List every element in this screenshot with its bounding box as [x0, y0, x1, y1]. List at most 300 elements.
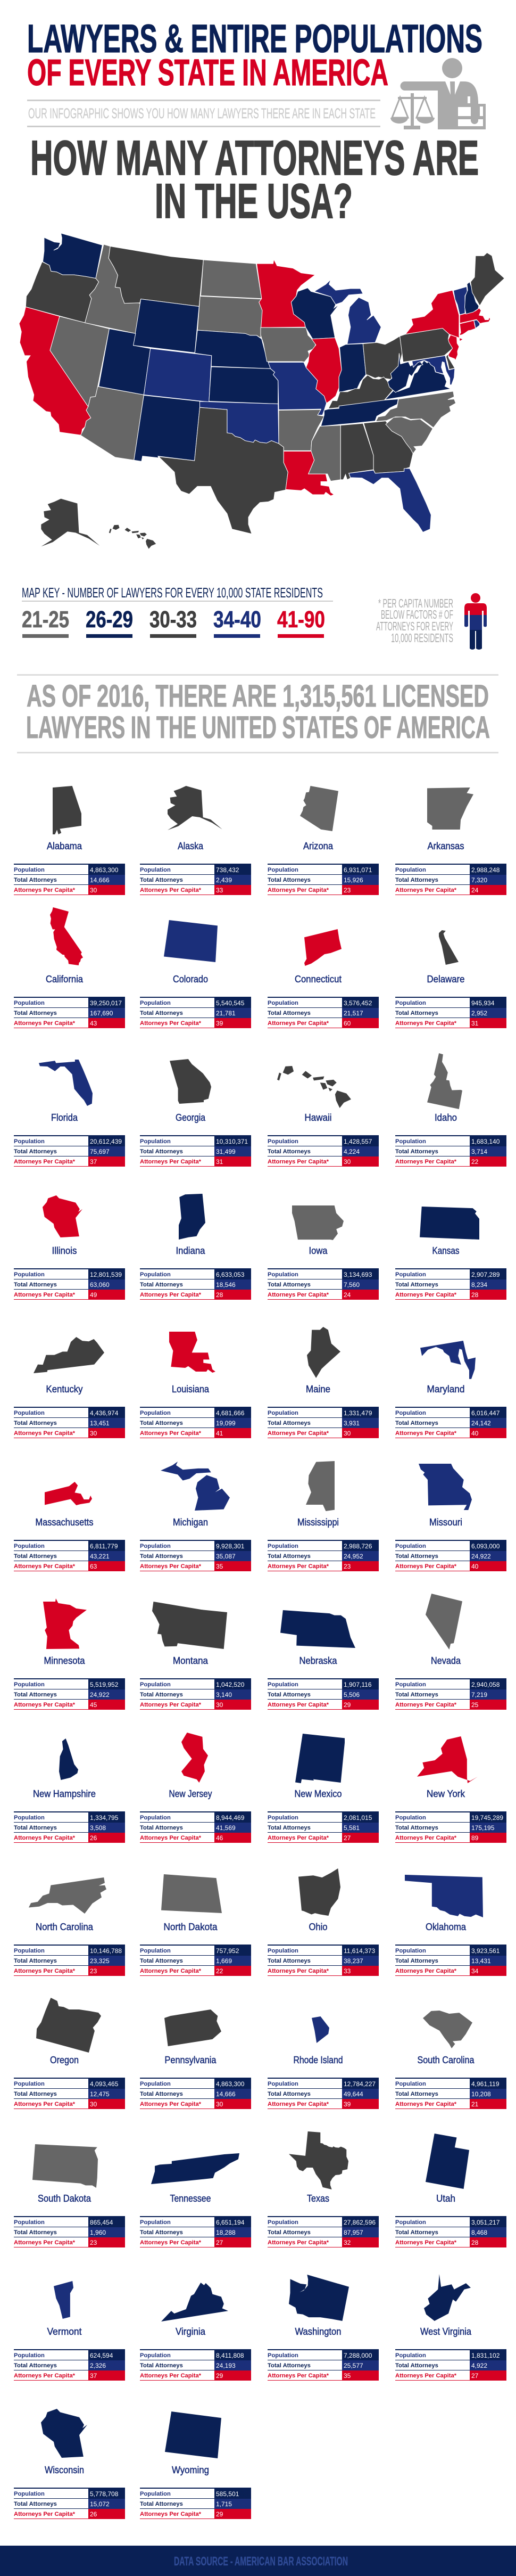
stats: Maine: Attorneys Per Capita*: [268, 1430, 329, 1437]
card: Rhode Island: [268, 2016, 379, 2109]
stats: Colorado: Attorneys Per Capita*: [140, 1020, 202, 1027]
stats: Texas: Population: [268, 2219, 298, 2226]
stats: North Carolina: 10,146,788: [90, 1947, 122, 1955]
stats: West Virginia: Total Attorneys: [395, 2362, 438, 2369]
stats: Connecticut: [268, 997, 379, 1028]
name: Alaska: Alaska: [178, 841, 204, 851]
stats: Wisconsin: Attorneys Per Capita*: [14, 2511, 76, 2517]
subtitle strip: [27, 100, 380, 127]
stats: North Dakota: 757,952: [216, 1947, 239, 1955]
stats: New Mexico: Attorneys Per Capita*: [268, 1835, 329, 1841]
stats: Maryland: [395, 1407, 506, 1438]
icon: Colorado: [164, 920, 218, 962]
stats: South Dakota: Total Attorneys: [14, 2229, 57, 2236]
key range: 30-33: [149, 606, 197, 638]
stats: Indiana: 18,546: [216, 1281, 236, 1289]
stats: North Dakota: 1,669: [216, 1957, 232, 1965]
stats: Massachusetts: Attorneys Per Capita*: [14, 1563, 76, 1570]
stats: Alabama: [14, 864, 125, 895]
card: Colorado: [140, 920, 251, 1028]
stats: Maryland: Total Attorneys: [395, 1420, 438, 1426]
card: Florida: [14, 1060, 125, 1167]
stats: Ohio: 38,237: [344, 1957, 363, 1965]
name: Nebraska: Nebraska: [299, 1655, 337, 1666]
icon: Louisiana: [169, 1332, 215, 1373]
stats: Arizona: 23: [344, 887, 351, 894]
stats: Virginia: 29: [216, 2372, 223, 2380]
stats: Kansas: [395, 1268, 506, 1300]
stats: Utah: 8,468: [471, 2229, 487, 2236]
stats: Pennsylvania: Attorneys Per Capita*: [140, 2101, 202, 2107]
stats: New Hampshire: [14, 1811, 125, 1843]
card: Washington: [268, 2275, 379, 2381]
stats: Oregon: Total Attorneys: [14, 2091, 57, 2097]
stats: Massachusetts: 43,221: [90, 1553, 110, 1560]
stats: Kansas: Population: [395, 1271, 426, 1278]
stats: Florida: Population: [14, 1138, 45, 1145]
stats: Massachusetts: Total Attorneys: [14, 1553, 57, 1560]
stats: Maryland: 24,142: [471, 1420, 491, 1427]
name: West Virginia: West Virginia: [420, 2326, 472, 2337]
card: Nevada: [395, 1594, 506, 1710]
stats: New Mexico: 5,581: [344, 1824, 360, 1832]
icon: California: [50, 907, 83, 965]
stats: California: Population: [14, 1000, 45, 1006]
stats: Nevada: Attorneys Per Capita*: [395, 1702, 457, 1708]
icon: North Carolina: [29, 1877, 106, 1914]
name: South Carolina: South Carolina: [417, 2055, 475, 2065]
stats: Alabama: Population: [14, 867, 45, 873]
card: Alabama: [14, 786, 125, 895]
card: New Hampshire: [14, 1738, 125, 1843]
stats: North Carolina: 23,325: [90, 1957, 110, 1965]
card: Tennessee: [140, 2153, 251, 2247]
name: Indiana: Indiana: [176, 1245, 205, 1256]
name: New York: New York: [427, 1789, 465, 1799]
stats: Utah: Attorneys Per Capita*: [395, 2239, 457, 2246]
stats: West Virginia: 1,831,102: [471, 2352, 500, 2359]
stats: South Carolina: Population: [395, 2081, 426, 2087]
key range: 34-40: 34-40: [213, 606, 261, 633]
footer: data source: DATA SOURCE - AMERICAN BAR ASSOCIATION: [174, 2554, 348, 2568]
icon: Minnesota: [43, 1598, 87, 1649]
card: Montana: [140, 1602, 251, 1710]
stats: Alabama: 30: [90, 887, 97, 894]
stats: Washington: [268, 2349, 379, 2381]
card: Ohio: [268, 1868, 379, 1976]
icon: Delaware: [439, 930, 459, 965]
stats: New Jersey: 46: [216, 1834, 223, 1842]
stats: Connecticut: Attorneys Per Capita*: [268, 1020, 329, 1027]
stats: Iowa: 7,560: [344, 1281, 360, 1289]
stats: Arizona: 15,926: [344, 876, 363, 884]
stats: Vermont: Attorneys Per Capita*: [14, 2373, 76, 2379]
card: Maryland: [395, 1341, 506, 1438]
card: Utah: [395, 2134, 506, 2247]
card: Arkansas: [395, 787, 506, 895]
stats: South Carolina: Total Attorneys: [395, 2091, 438, 2097]
stats: West Virginia: Attorneys Per Capita*: [395, 2373, 457, 2379]
stats: Delaware: Population: [395, 1000, 426, 1006]
name: Arizona: Arizona: [303, 841, 334, 851]
key range: 41-90: [277, 606, 325, 638]
stats: Nevada: 25: [471, 1701, 479, 1709]
stats: Ohio: 11,614,373: [344, 1947, 375, 1955]
name: Minnesota: Minnesota: [44, 1655, 85, 1666]
stats: Missouri: 24,922: [471, 1553, 491, 1560]
stats: Missouri: Attorneys Per Capita*: [395, 1563, 457, 1570]
stats: Arizona: 6,931,071: [344, 866, 372, 874]
icon: Montana: [152, 1602, 227, 1649]
icon: Oklahoma: [405, 1875, 483, 1917]
icon: Georgia: [170, 1059, 211, 1104]
stats: New Hampshire: Total Attorneys: [14, 1825, 57, 1831]
stats: Delaware: 31: [471, 1020, 479, 1027]
stats: North Carolina: Population: [14, 1948, 45, 1954]
name: Idaho: Idaho: [435, 1112, 457, 1123]
stats: New York: 175,195: [471, 1824, 495, 1832]
stats: Texas: Total Attorneys: [268, 2229, 311, 2236]
stats: Michigan: Attorneys Per Capita*: [140, 1563, 202, 1570]
stats: Louisiana: 19,099: [216, 1420, 236, 1427]
icon: Virginia: [161, 2283, 228, 2321]
name: Alabama: Alabama: [47, 841, 82, 851]
stats: Louisiana: 41: [216, 1430, 223, 1437]
name: Mississippi: Mississippi: [297, 1517, 339, 1528]
name: Missouri: Missouri: [429, 1517, 462, 1528]
stats: Maryland: Attorneys Per Capita*: [395, 1430, 457, 1437]
stats: Hawaii: Attorneys Per Capita*: [268, 1159, 329, 1165]
stats: Alaska: 2,439: [216, 876, 232, 884]
stats: New Jersey: Population: [140, 1815, 171, 1821]
stats: Oklahoma: [395, 1945, 506, 1976]
stats: Arkansas: 7,320: [471, 876, 487, 884]
stats: Vermont: Total Attorneys: [14, 2362, 57, 2369]
stats: Kentucky: 30: [90, 1430, 97, 1437]
stats: Oklahoma: Attorneys Per Capita*: [395, 1968, 457, 1974]
stats: Colorado: Total Attorneys: [140, 1010, 183, 1016]
icon: West Virginia: [424, 2274, 471, 2321]
stats: South Dakota: 865,454: [90, 2219, 113, 2226]
stats: Iowa: Attorneys Per Capita*: [268, 1292, 329, 1298]
stats: Pennsylvania: Total Attorneys: [140, 2091, 183, 2097]
key range: 30-33: 30-33: [149, 606, 197, 633]
stats: Florida: [14, 1135, 125, 1167]
stats: Utah: 3,051,217: [471, 2219, 500, 2226]
key range: 34-40: [213, 606, 261, 638]
icon: North Dakota: [161, 1874, 222, 1913]
stats: Maine: 30: [344, 1430, 351, 1437]
card: Delaware: [395, 930, 506, 1028]
icon: Massachusetts: [45, 1482, 92, 1505]
stats: Rhode Island: Population: [268, 2081, 298, 2087]
icon: Connecticut: [304, 929, 342, 966]
icon: New Jersey: [181, 1733, 208, 1783]
card: New Jersey: [140, 1733, 251, 1843]
card: Vermont: [14, 2281, 125, 2381]
stats: Wisconsin: Population: [14, 2491, 45, 2497]
stats: Alabama: 14,666: [90, 876, 110, 884]
stats: Utah: [395, 2216, 506, 2247]
key range: 26-29: 26-29: [86, 606, 133, 633]
card: Oregon: [14, 1998, 125, 2109]
stats: Maryland: 6,016,447: [471, 1409, 500, 1417]
stats: Florida: Attorneys Per Capita*: [14, 1159, 76, 1165]
stats: Idaho: Attorneys Per Capita*: [395, 1159, 457, 1165]
stats: Hawaii: 30: [344, 1158, 351, 1166]
stats: Oklahoma: 34: [471, 1967, 479, 1975]
stats: South Dakota: Attorneys Per Capita*: [14, 2239, 76, 2246]
heading: how many attorneys are in the USA: IN THE USA?: [155, 174, 353, 228]
heading: how many attorneys are in the USA: [30, 131, 479, 228]
stats: New York: Total Attorneys: [395, 1825, 438, 1831]
card: West Virginia: [395, 2274, 506, 2381]
stats: Colorado: 39: [216, 1020, 223, 1027]
key range: 21-25: 21-25: [22, 606, 69, 633]
stats: Oklahoma: Total Attorneys: [395, 1958, 438, 1964]
stats: Vermont: [14, 2349, 125, 2381]
stats: Hawaii: Total Attorneys: [268, 1148, 311, 1155]
stats: Arizona: [268, 864, 379, 895]
stats: Alabama: 4,863,300: [90, 866, 119, 874]
stats: Minnesota: Attorneys Per Capita*: [14, 1702, 76, 1708]
footer: data source: [0, 2546, 516, 2576]
stats: Kentucky: Population: [14, 1410, 45, 1416]
name: Georgia: Georgia: [176, 1112, 206, 1123]
stats: Nevada: Population: [395, 1681, 426, 1688]
name: Hawaii: Hawaii: [304, 1112, 332, 1123]
stats: Georgia: 31,499: [216, 1148, 236, 1155]
stats: Pennsylvania: [140, 2078, 251, 2109]
stats: Indiana: 28: [216, 1291, 223, 1299]
name: Connecticut: Connecticut: [295, 974, 342, 985]
stats: Delaware: [395, 997, 506, 1028]
stats: Pennsylvania: Population: [140, 2081, 171, 2087]
stats: Tennessee: Total Attorneys: [140, 2229, 183, 2236]
stats: Louisiana: [140, 1407, 251, 1438]
name: Virginia: Virginia: [176, 2326, 206, 2337]
stats: Ohio: [268, 1945, 379, 1976]
stats: Idaho: [395, 1135, 506, 1167]
stats: New York: 19,745,289: [471, 1814, 503, 1822]
stats: Illinois: [14, 1268, 125, 1300]
stats: Alaska: Population: [140, 867, 171, 873]
stats: Arizona: Attorneys Per Capita*: [268, 887, 329, 893]
stats: Colorado: Population: [140, 1000, 171, 1006]
map key: [22, 585, 333, 638]
stats: Iowa: Population: [268, 1271, 298, 1278]
icon: Rhode Island: [312, 2016, 329, 2043]
stats: Nebraska: 5,506: [344, 1691, 360, 1699]
name: Arkansas: Arkansas: [428, 841, 464, 851]
card: Texas: [268, 2131, 379, 2247]
stats: Indiana: Total Attorneys: [140, 1282, 183, 1288]
name: California: California: [46, 974, 84, 985]
stats: Kansas: 8,234: [471, 1281, 487, 1289]
stats: California: [14, 997, 125, 1028]
stats: Wyoming: 29: [216, 2511, 223, 2518]
stats: Kansas: Total Attorneys: [395, 1282, 438, 1288]
card: Indiana: [140, 1194, 251, 1300]
card: Maine: [268, 1327, 379, 1438]
icon: Washington: [289, 2275, 349, 2321]
stats: Wyoming: Attorneys Per Capita*: [140, 2511, 202, 2517]
icon: Arizona: [300, 786, 338, 831]
icon: Indiana: [179, 1194, 205, 1240]
stats: California: 43: [90, 1020, 97, 1027]
total licensed lawyers banner: [17, 674, 498, 753]
stats: Wyoming: 1,715: [216, 2500, 232, 2508]
stats: Idaho: Population: [395, 1138, 426, 1145]
stats: Connecticut: Total Attorneys: [268, 1010, 311, 1016]
stats: Wisconsin: 15,072: [90, 2500, 110, 2508]
stats: Tennessee: 27: [216, 2239, 223, 2246]
card: South Carolina: [395, 2011, 506, 2109]
stats: Mississippi: [268, 1540, 379, 1571]
stats: Virginia: Total Attorneys: [140, 2362, 183, 2369]
name: Pennsylvania: Pennsylvania: [165, 2055, 217, 2065]
stats: Vermont: 624,594: [90, 2352, 113, 2359]
card: Alaska: [140, 786, 251, 895]
stats: Nevada: 2,940,058: [471, 1681, 500, 1688]
stats: New York: Population: [395, 1815, 426, 1821]
icon: Illinois: [43, 1195, 82, 1237]
icon: Vermont: [54, 2281, 73, 2319]
stats: Wyoming: 585,501: [216, 2490, 239, 2498]
stats: New Mexico: [268, 1811, 379, 1843]
stats: North Dakota: Attorneys Per Capita*: [140, 1968, 202, 1974]
icon: Nebraska: [280, 1610, 355, 1648]
icon: South Carolina: [423, 2011, 472, 2048]
stats: Arizona: Population: [268, 867, 298, 873]
stats: Texas: 32: [344, 2239, 351, 2246]
stats: Florida: 37: [90, 1158, 97, 1166]
stats: Vermont: 2,326: [90, 2362, 106, 2369]
stats: North Dakota: [140, 1945, 251, 1976]
stats: New Hampshire: 3,508: [90, 1824, 106, 1832]
stats: Virginia: 24,193: [216, 2362, 236, 2369]
stats: Nevada: 7,219: [471, 1691, 487, 1699]
stats: Montana: Total Attorneys: [140, 1692, 183, 1698]
name: Wisconsin: Wisconsin: [45, 2465, 84, 2475]
stats: Maryland: 40: [471, 1430, 479, 1437]
card: California: [14, 907, 125, 1028]
stats: New Jersey: 41,569: [216, 1824, 236, 1832]
stats: Illinois: Total Attorneys: [14, 1282, 57, 1288]
name: Tennessee: Tennessee: [170, 2193, 211, 2204]
stats: Georgia: [140, 1135, 251, 1167]
stats: Minnesota: 5,519,952: [90, 1681, 119, 1688]
stats: Hawaii: [268, 1135, 379, 1167]
stats: New Jersey: Attorneys Per Capita*: [140, 1835, 202, 1841]
card: New York: [395, 1736, 506, 1843]
stats: Pennsylvania: 30: [216, 2101, 223, 2108]
stats: West Virginia: 4,922: [471, 2362, 487, 2369]
stats: Maine: Population: [268, 1410, 298, 1416]
icon: Wisconsin: [41, 2409, 87, 2458]
stats: Massachusetts: 6,811,779: [90, 1543, 118, 1550]
stats: Delaware: 2,952: [471, 1010, 487, 1017]
stats: Rhode Island: 49,644: [344, 2090, 363, 2098]
stats: Colorado: 5,540,545: [216, 999, 245, 1007]
stats: Vermont: Population: [14, 2352, 45, 2359]
stats: Georgia: Total Attorneys: [140, 1148, 183, 1155]
card: North Dakota: [140, 1874, 251, 1976]
stats: North Carolina: Total Attorneys: [14, 1958, 57, 1964]
stats: Wyoming: Population: [140, 2491, 171, 2497]
stats: Indiana: 6,633,053: [216, 1271, 245, 1278]
stats: Indiana: Attorneys Per Capita*: [140, 1292, 202, 1298]
card: North Carolina: [14, 1877, 125, 1976]
card: South Dakota: [14, 2144, 125, 2247]
stats: South Dakota: 1,960: [90, 2229, 106, 2236]
stats: Massachusetts: Population: [14, 1543, 45, 1549]
stats: Nebraska: 29: [344, 1701, 351, 1709]
stats: Montana: Attorneys Per Capita*: [140, 1702, 202, 1708]
icon: person in flag colours: [464, 593, 487, 650]
stats: Washington: 35: [344, 2372, 351, 2380]
name: Kansas: Kansas: [432, 1245, 460, 1256]
stats: Louisiana: Attorneys Per Capita*: [140, 1430, 202, 1437]
stats: Utah: Total Attorneys: [395, 2229, 438, 2236]
card: Illinois: [14, 1195, 125, 1300]
icon: Tennessee: [151, 2153, 239, 2184]
stats: Montana: 30: [216, 1701, 223, 1709]
icon: Wyoming: [165, 2411, 221, 2458]
stats: Virginia: 8,411,808: [216, 2352, 244, 2359]
stats: Texas: [268, 2216, 379, 2247]
stats: Minnesota: 24,922: [90, 1691, 110, 1699]
stats: South Dakota: 23: [90, 2239, 97, 2246]
name: Kentucky: Kentucky: [46, 1384, 83, 1394]
stats: Alaska: 738,432: [216, 866, 239, 874]
stats: Nebraska: Total Attorneys: [268, 1692, 311, 1698]
stats: Rhode Island: Total Attorneys: [268, 2091, 311, 2097]
card: Missouri: [395, 1464, 506, 1571]
card: Kentucky: [14, 1337, 125, 1438]
title: Lawyers and entire populations of every state in America: [27, 17, 482, 93]
name: Oklahoma: Oklahoma: [426, 1922, 467, 1932]
stats: New Mexico: 27: [344, 1834, 351, 1842]
stats: California: Attorneys Per Capita*: [14, 1020, 76, 1027]
stats: Michigan: 35: [216, 1563, 223, 1570]
stats: Alaska: [140, 864, 251, 895]
stats: Oregon: [14, 2078, 125, 2109]
stats: Maryland: Population: [395, 1410, 426, 1416]
stats: Texas: Attorneys Per Capita*: [268, 2239, 329, 2246]
name: North Dakota: North Dakota: [164, 1922, 218, 1932]
stats: West Virginia: 27: [471, 2372, 479, 2380]
stats: Tennessee: 18,288: [216, 2229, 236, 2236]
stats: Iowa: Total Attorneys: [268, 1282, 311, 1288]
stats: Pennsylvania: 14,666: [216, 2090, 236, 2098]
stats: Oregon: 12,475: [90, 2090, 110, 2098]
stats: Nebraska: Attorneys Per Capita*: [268, 1702, 329, 1708]
stats: Idaho: Total Attorneys: [395, 1148, 438, 1155]
card: Arizona: [268, 786, 379, 895]
stats: New York: Attorneys Per Capita*: [395, 1835, 457, 1841]
map of the USA coloured by lawyers per capita: [19, 233, 504, 549]
name: South Dakota: South Dakota: [38, 2193, 91, 2204]
stats: Illinois: Population: [14, 1271, 45, 1278]
stats: West Virginia: Population: [395, 2352, 426, 2359]
stats: Louisiana: 4,681,666: [216, 1409, 245, 1417]
name: Louisiana: Louisiana: [172, 1384, 210, 1394]
stats: Georgia: Population: [140, 1138, 171, 1145]
stats: Wisconsin: Total Attorneys: [14, 2501, 57, 2507]
icon: Ohio: [298, 1868, 340, 1916]
stats: Virginia: [140, 2349, 251, 2381]
